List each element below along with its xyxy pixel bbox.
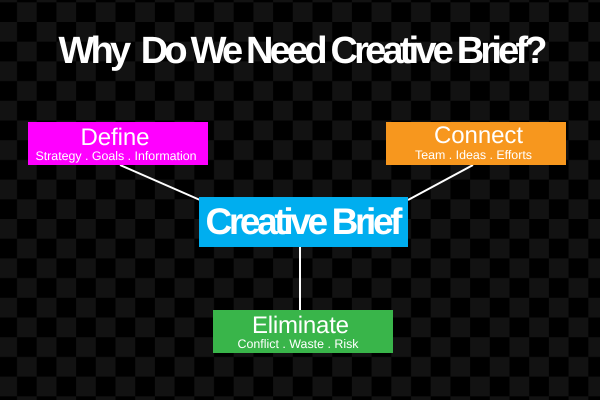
connector: define to creative brief bbox=[120, 165, 200, 200]
connector: creative brief to eliminate bbox=[299, 247, 301, 310]
heading: eliminate: Eliminate bbox=[252, 312, 349, 339]
panel: creative brief bbox=[199, 197, 408, 247]
heading: connect: Connect bbox=[434, 122, 523, 149]
panel: eliminate bbox=[213, 310, 393, 353]
title: Why Do We Need Creative Brief? bbox=[58, 30, 548, 72]
text: define details: Strategy . Goals . Information bbox=[36, 149, 197, 163]
panel: connect bbox=[386, 122, 566, 165]
heading: creative brief: Creative Brief bbox=[206, 201, 403, 242]
panel: define bbox=[28, 122, 208, 165]
heading: define: Define bbox=[80, 124, 150, 151]
connector: connect to creative brief bbox=[408, 165, 473, 200]
text: connect details: Team . Ideas . Efforts bbox=[415, 148, 532, 162]
text: eliminate details: Conflict . Waste . Risk bbox=[238, 337, 359, 351]
